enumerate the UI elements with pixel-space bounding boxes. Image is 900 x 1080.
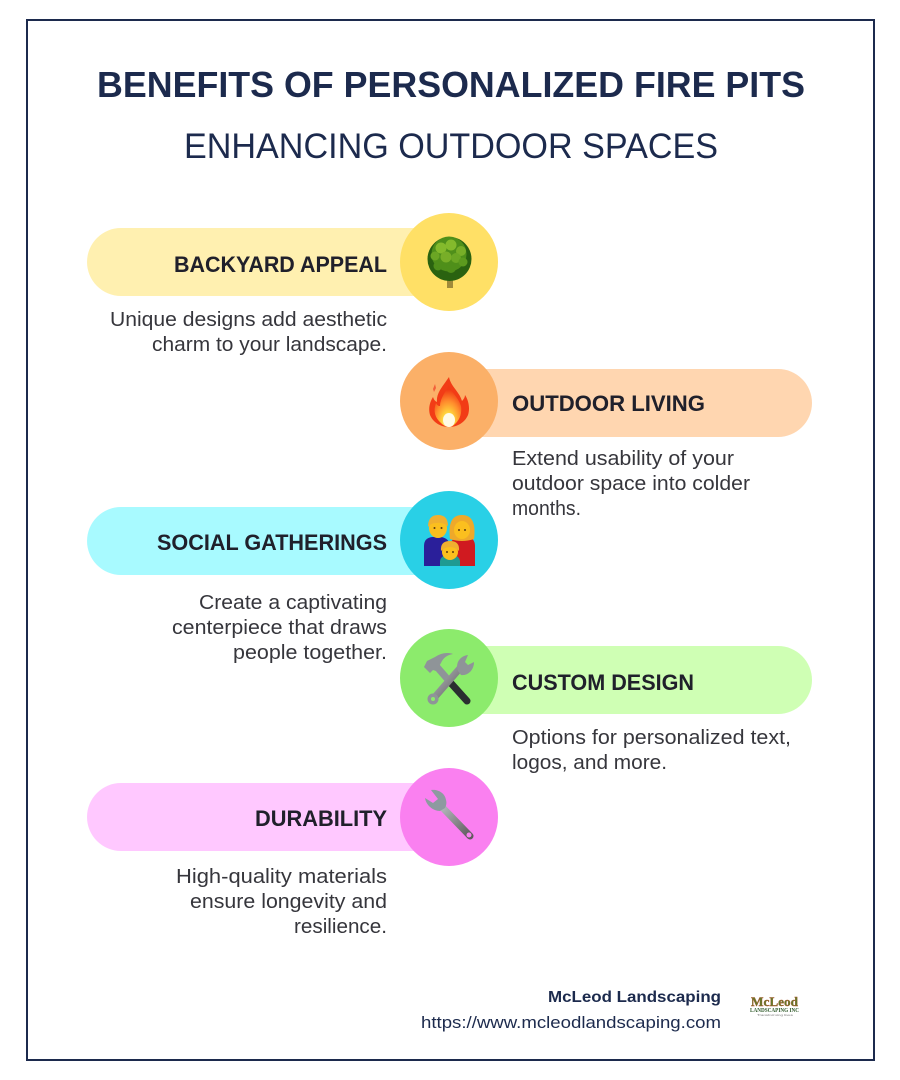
text: outdoor living: Extend usability of your [512,448,734,470]
text: custom design [512,727,791,774]
label: backyard appeal: BACKYARD APPEAL [174,252,387,277]
text: outdoor living [512,448,750,520]
icon: tree [428,236,472,288]
text: durability: ensure longevity and [190,891,387,913]
circle: outdoor living [400,352,498,450]
panel: backyard appeal [87,213,498,356]
icon: fire [429,377,469,427]
text: custom design: logos, and more. [512,752,667,774]
text: durability: High-quality materials [176,866,387,888]
pill: custom design [470,646,812,714]
text: custom design: Options for personalized text, [512,727,791,749]
circle: durability [400,768,498,866]
text: backyard appeal: charm to your landscape. [152,334,387,356]
icon: family [424,515,475,566]
text: social gatherings [172,592,387,664]
text: durability: resilience. [294,916,387,938]
text: durability [176,866,387,938]
logo: LANDSCAPING INC [750,1008,799,1014]
logo [750,994,799,1017]
panel: custom design [400,629,812,774]
circle: social gatherings [400,491,498,589]
subtitle: ENHANCING OUTDOOR SPACES [184,127,718,166]
pill: outdoor living [470,369,812,437]
label: social gatherings: SOCIAL GATHERINGS [157,530,387,555]
footer: company name: McLeod Landscaping [548,989,721,1006]
label: custom design: CUSTOM DESIGN [512,670,694,695]
circle: custom design [400,629,498,727]
title: BENEFITS OF PERSONALIZED FIRE PITS [97,64,805,105]
pill: durability [87,783,430,851]
text: outdoor living: outdoor space into colder [512,473,750,495]
logo: Transforming lives [757,1013,794,1017]
text: social gatherings: centerpiece that draws [172,617,387,639]
text: backyard appeal [110,309,387,356]
text: backyard appeal: Unique designs add aesthetic [110,309,387,331]
panel: social gatherings [87,491,498,664]
icon: wrench [425,790,472,838]
panel: outdoor living [400,352,812,520]
logo: McLeod [751,994,799,1009]
pill: social gatherings [87,507,430,575]
label: durability: DURABILITY [255,806,387,831]
text: social gatherings: people together. [233,642,387,664]
icon: hammer and wrench [424,653,474,704]
label: outdoor living: OUTDOOR LIVING [512,391,705,416]
footer: url: https://www.mcleodlandscaping.com [421,1013,721,1032]
panel: durability [87,768,498,938]
circle: backyard appeal [400,213,498,311]
text: social gatherings: Create a captivating [199,592,387,614]
pill: backyard appeal [87,228,430,296]
text: outdoor living: months. [512,498,581,520]
